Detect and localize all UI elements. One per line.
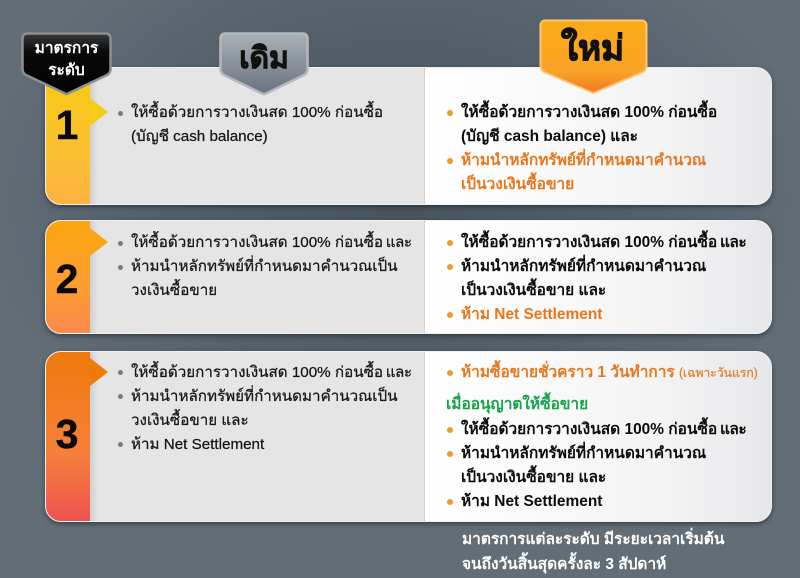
text: level 3 new <box>446 360 758 510</box>
badge: new: ใหม่ <box>561 29 624 68</box>
pointer: level 1 <box>90 98 108 126</box>
text: level 2 new <box>447 230 746 323</box>
text: level 2 old: ห้ามนำหลักทรัพย์ที่กำหนดมาคำนวณเป็น <box>131 258 398 275</box>
badge: old: เดิม <box>239 42 289 75</box>
badge: new <box>540 20 648 94</box>
text: level 3 new: ห้าม Net Settlement <box>461 493 602 510</box>
text: level 3 old: ห้าม Net Settlement <box>131 436 264 453</box>
text: level 3 new: ให้ซื้อด้วยการวางเงินสด 100% ก่อนซื้อ และ <box>461 421 746 438</box>
number 2: 2 <box>56 256 78 302</box>
text: level 1 new: เป็นวงเงินซื้อขาย <box>461 176 574 193</box>
text: level 2 new: เป็นวงเงินซื้อขาย และ <box>461 282 606 299</box>
text: level 1 new: ให้ซื้อด้วยการวางเงินสด 100% ก่อนซื้อ <box>461 104 717 121</box>
text: level 3 old: ให้ซื้อด้วยการวางเงินสด 100% ก่อนซื้อ และ <box>131 364 412 381</box>
panel: level 1 <box>45 67 772 205</box>
text: level 2 new: ให้ซื้อด้วยการวางเงินสด 100% ก่อนซื้อ และ <box>461 234 746 251</box>
text: level 1 old <box>118 100 383 145</box>
badge: level header <box>21 32 112 96</box>
panel: level 2 <box>45 220 772 334</box>
pointer: level 3 <box>90 358 108 386</box>
text: level 2 old: วงเงินซื้อขาย <box>131 282 217 299</box>
footnote <box>462 528 724 574</box>
pointer: level 2 <box>90 228 108 256</box>
text: level 1 old: (บัญชี cash balance) <box>131 128 268 145</box>
footnote: จนถึงวันสิ้นสุดครั้งละ 3 สัปดาห์ <box>462 556 666 572</box>
text: level 2 new: ห้ามนำหลักทรัพย์ที่กำหนดมาคำนวณ <box>461 258 706 275</box>
badge: level header: มาตรการ <box>35 40 98 57</box>
footnote: มาตรการแต่ละระดับ มีระยะเวลาเริ่มต้น <box>462 531 724 548</box>
badge: level header: ระดับ <box>48 62 85 79</box>
text: level 2 old <box>118 230 412 299</box>
text: level 3 new: ห้ามซื้อขายชั่วคราว 1 วันทำการ (เฉพาะวันแรก) <box>461 364 758 381</box>
number 3: 3 <box>56 411 78 457</box>
text: level 1 old: ให้ซื้อด้วยการวางเงินสด 100% ก่อนซื้อ <box>131 104 383 121</box>
text: level 3 old: ห้ามนำหลักทรัพย์ที่กำหนดมาคำนวณเป็น <box>131 388 398 405</box>
text: level 2 new: ห้าม Net Settlement <box>461 306 602 323</box>
text: level 1 new: ห้ามนำหลักทรัพย์ที่กำหนดมาคำนวณ <box>461 152 706 169</box>
text: level 3 old: วงเงินซื้อขาย และ <box>131 412 249 429</box>
panel: level 3 <box>45 351 772 522</box>
text: level 3 new: เป็นวงเงินซื้อขาย และ <box>461 469 606 486</box>
text: level 1 new: (บัญชี cash balance) และ <box>461 128 638 145</box>
text: level 3 new: เมื่ออนุญาตให้ซื้อขาย <box>446 396 588 413</box>
text: level 1 new <box>447 100 717 193</box>
text: level 3 new: ห้ามนำหลักทรัพย์ที่กำหนดมาคำนวณ <box>461 445 706 462</box>
text: level 2 old: ให้ซื้อด้วยการวางเงินสด 100% ก่อนซื้อ และ <box>131 234 412 251</box>
badge: old <box>219 32 309 96</box>
text: level 3 old <box>118 360 412 453</box>
number 1: 1 <box>56 102 78 148</box>
